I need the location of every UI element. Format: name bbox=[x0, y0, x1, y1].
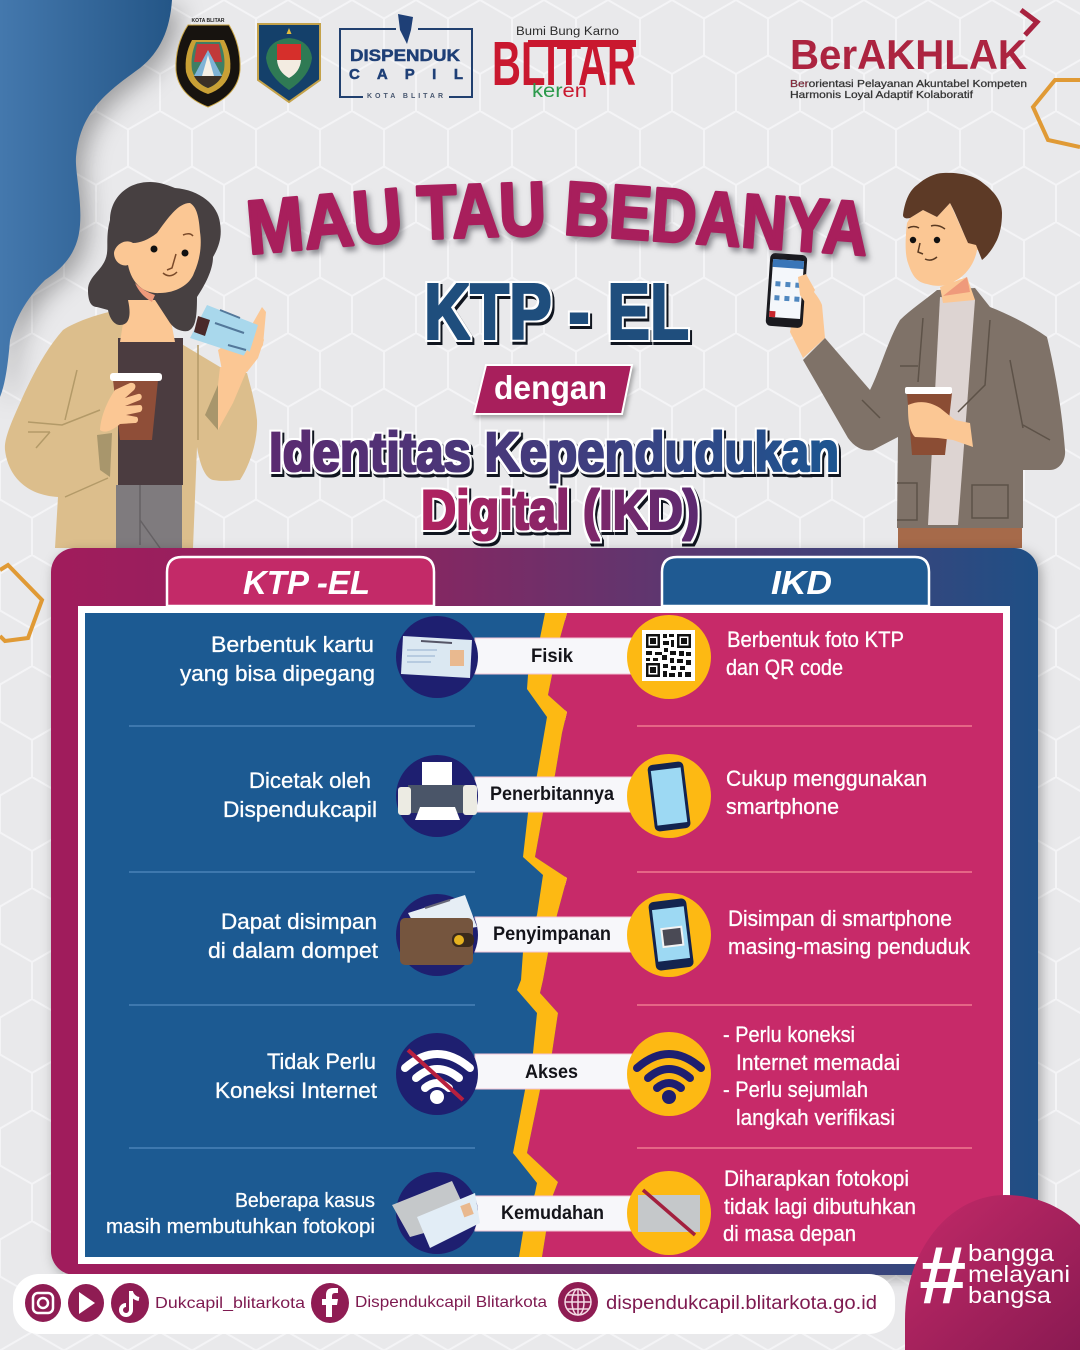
band: Fisik: Fisik bbox=[531, 646, 573, 667]
text: left: Koneksi Internet bbox=[215, 1078, 377, 1103]
hashtag badge: bangga melayani bangsa: bangga bbox=[968, 1240, 1054, 1266]
illustration: man holding phone bbox=[765, 173, 1065, 548]
logo: Kota Blitar shield bbox=[176, 18, 240, 107]
illustration: woman holding KTP card bbox=[5, 182, 266, 548]
text: left: di dalam dompet bbox=[208, 938, 378, 963]
text: left: Beberapa kasus bbox=[235, 1190, 375, 1212]
logo: BerAKHLAK: BerAKHLAK bbox=[790, 31, 1027, 78]
panel background bbox=[51, 548, 1038, 1275]
tab: IKD bbox=[662, 557, 929, 606]
text: right: smartphone bbox=[726, 794, 839, 819]
text: right: langkah verifikasi bbox=[736, 1105, 895, 1130]
hashtag badge: bangga melayani bangsa bbox=[905, 1195, 1080, 1350]
band: Fisik bbox=[475, 638, 632, 674]
text: right: masing-masing penduduk bbox=[728, 934, 971, 959]
text: right bbox=[726, 766, 927, 819]
row: Akses bbox=[215, 1022, 900, 1130]
logo: BerAKHLAK bbox=[790, 10, 1037, 101]
text: right: - Perlu koneksi bbox=[723, 1022, 855, 1047]
title: Mau Tau Bedanya bbox=[243, 166, 871, 272]
icon: printer bbox=[396, 755, 478, 837]
logo: Blitar keren: BLITAR bbox=[492, 30, 636, 99]
band: Penyimpanan bbox=[475, 917, 632, 952]
text: left: yang bisa dipegang bbox=[180, 661, 375, 686]
hashtag badge: bangga melayani bangsa: melayani bbox=[968, 1261, 1070, 1287]
icon: globe bbox=[558, 1282, 598, 1322]
white frame bbox=[78, 606, 1010, 1264]
title: Mau Tau Bedanya: TAU bbox=[416, 167, 548, 256]
band: Penerbitannya bbox=[475, 777, 632, 812]
text: right: di masa depan bbox=[723, 1221, 856, 1246]
text: right: Diharapkan fotokopi bbox=[724, 1166, 909, 1191]
logo: Kota Blitar shield: KOTA BLITAR bbox=[192, 18, 225, 24]
hashtag badge: bangga melayani bangsa: bangsa bbox=[968, 1282, 1051, 1308]
text: Facebook handle: Dispendukcapil Blitarkota bbox=[355, 1294, 547, 1311]
icon: tiktok bbox=[111, 1283, 149, 1323]
icon: facebook bbox=[311, 1283, 349, 1323]
blue corner shape bbox=[0, 0, 172, 397]
logo: Dispendukcapil: DISPENDUK bbox=[350, 46, 461, 65]
icon: photocopy cards bbox=[392, 1172, 480, 1254]
logo: Kemendagri shield bbox=[258, 24, 320, 102]
text: left: Dicetak oleh bbox=[249, 768, 371, 793]
icon: instagram bbox=[25, 1284, 61, 1322]
text: left bbox=[106, 1190, 375, 1238]
icon: wallet bbox=[396, 894, 478, 976]
icon: wifi bbox=[627, 1032, 711, 1116]
title: Mau Tau Bedanya: MAU bbox=[243, 173, 406, 271]
text: left: masih membutuhkan fotokopi bbox=[106, 1216, 375, 1238]
title: KTP - EL: KTP - EL bbox=[424, 267, 689, 356]
hexagon outline right bbox=[1033, 80, 1080, 147]
row: Kemudahan bbox=[106, 1166, 916, 1255]
text: left bbox=[180, 632, 375, 686]
hashtag badge: bangga melayani bangsa: # bbox=[918, 1230, 965, 1321]
icon: youtube bbox=[68, 1284, 104, 1322]
logo: Dispendukcapil: KOTA BLITAR bbox=[367, 93, 443, 100]
footer: social links bbox=[13, 1274, 895, 1334]
text: right: Internet memadai bbox=[736, 1050, 900, 1075]
band: Kemudahan: Kemudahan bbox=[501, 1203, 604, 1224]
band: Akses bbox=[475, 1054, 632, 1089]
logo: BerAKHLAK: Berorientasi Pelayanan Akuntabel Kompeten bbox=[790, 78, 1027, 90]
band: Akses: Akses bbox=[525, 1062, 578, 1083]
text: right: Berbentuk foto KTP bbox=[727, 627, 904, 652]
text: left bbox=[208, 909, 378, 963]
logo: BerAKHLAK: Harmonis Loyal Adaptif Kolaboratif bbox=[790, 89, 973, 101]
text: Instagram handle: Dukcapil_blitarkota bbox=[155, 1295, 305, 1312]
tab: IKD: IKD bbox=[771, 564, 832, 601]
text: left bbox=[215, 1049, 377, 1103]
logo: Blitar keren bbox=[492, 26, 636, 102]
tab: KTP-EL: KTP -EL bbox=[243, 564, 370, 601]
label: dengan bbox=[474, 365, 632, 414]
icon: KTP card bbox=[396, 616, 478, 698]
text: left bbox=[223, 768, 377, 822]
logo: Dispendukcapil bbox=[340, 14, 472, 100]
text: right bbox=[726, 627, 904, 680]
row: Penerbitannya bbox=[223, 754, 927, 838]
icon: smartphone bbox=[627, 754, 711, 838]
title: Digital (IKD): Digital (IKD) bbox=[421, 478, 699, 541]
footer pill bbox=[13, 1274, 895, 1334]
text: right bbox=[728, 906, 971, 959]
logo: Blitar keren: keren bbox=[532, 81, 587, 102]
hexagon outline left bbox=[0, 565, 42, 641]
text: right: Disimpan di smartphone bbox=[728, 906, 952, 931]
right column background bbox=[527, 613, 1003, 1257]
label: dengan: dengan bbox=[494, 369, 607, 406]
icon: phone with QR bbox=[627, 893, 711, 977]
text: left: Berbentuk kartu bbox=[211, 632, 374, 657]
text: right: Cukup menggunakan bbox=[726, 766, 927, 791]
panel: comparison bbox=[51, 548, 1038, 1275]
title: Identitas Kependudukan: Identitas Kependudukan bbox=[269, 420, 839, 483]
text: right: dan QR code bbox=[726, 655, 843, 680]
yellow divider bbox=[513, 613, 567, 1257]
band: Kemudahan bbox=[475, 1196, 632, 1231]
text: right bbox=[723, 1022, 900, 1130]
icon: QR code bbox=[627, 615, 711, 699]
icon: no photocopy bbox=[627, 1171, 711, 1255]
band: Penyimpanan: Penyimpanan bbox=[493, 924, 611, 945]
text: left: Dapat disimpan bbox=[221, 909, 377, 934]
text: website: dispendukcapil.blitarkota.go.id bbox=[606, 1293, 877, 1314]
text: left: Tidak Perlu bbox=[267, 1049, 376, 1074]
tab: KTP-EL bbox=[167, 557, 434, 606]
logo: Dispendukcapil: C A P I L bbox=[349, 66, 463, 83]
text: right bbox=[723, 1166, 916, 1246]
text: right: - Perlu sejumlah bbox=[723, 1077, 868, 1102]
title: Mau Tau Bedanya: BEDANYA bbox=[562, 166, 871, 272]
band: Penerbitannya: Penerbitannya bbox=[490, 784, 614, 805]
icon: wifi off bbox=[396, 1033, 478, 1115]
row: Penyimpanan bbox=[208, 893, 971, 977]
logo: Blitar keren: Bumi Bung Karno bbox=[516, 26, 619, 38]
text: left: Dispendukcapil bbox=[223, 797, 377, 822]
text: right: tidak lagi dibutuhkan bbox=[724, 1194, 916, 1219]
left column background bbox=[85, 613, 565, 1257]
row: Fisik bbox=[180, 615, 904, 699]
